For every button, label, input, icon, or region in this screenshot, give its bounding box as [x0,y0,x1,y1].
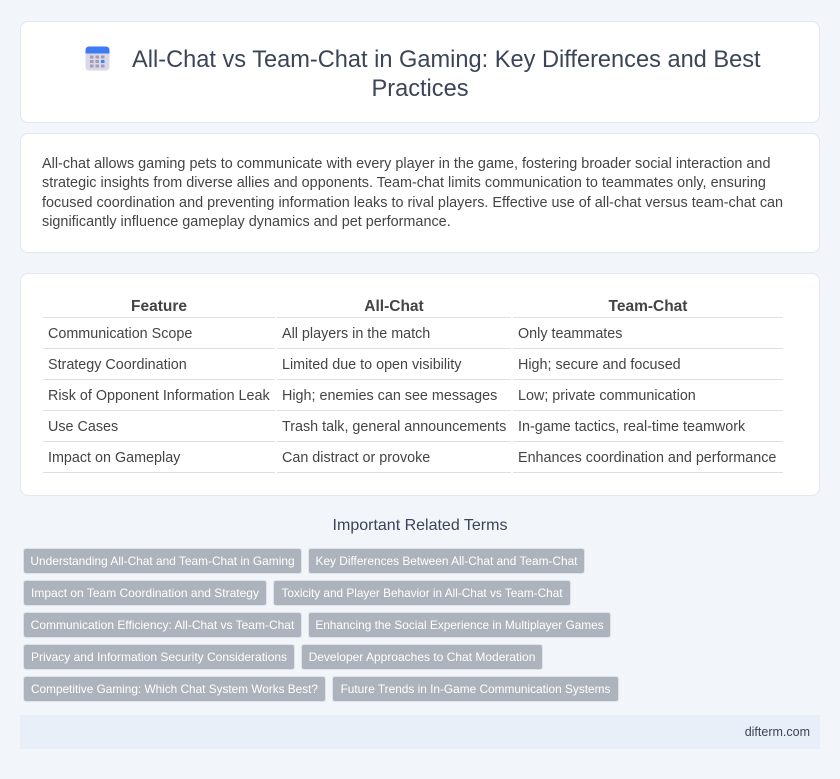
row: impact on gameplay [43,450,783,473]
table header rule [43,317,783,318]
tag [23,580,267,606]
table header: Feature: Feature [131,298,187,315]
text block: description: focused coordination and preventing information leaks to rival players. Effective use of all-chat versus team-chat can [42,195,783,211]
row: impact on gameplay: Can distract or provoke [282,450,430,466]
row: strategy coordination: Limited due to open visibility [282,357,461,373]
tag [23,548,302,574]
footer bar [20,715,820,749]
row: impact on gameplay: Impact on Gameplay [48,450,180,466]
text block: description [42,156,783,230]
table header: All-Chat: All-Chat [364,298,424,315]
row: information leak risk: High; enemies can see messages [282,388,497,404]
row: use cases: Use Cases [48,419,118,435]
comparison table [43,298,783,473]
row: communication scope [43,326,783,349]
icon: calendar grid [86,46,110,70]
tag: Key Differences Between All-Chat and Team-Chat [316,554,577,568]
panel: description card [20,133,820,253]
row: information leak risk: Low; private communication [518,388,696,404]
tag: Privacy and Information Security Considerations [31,650,287,664]
tag [301,644,543,670]
tag: Toxicity and Player Behavior in All-Chat vs Team-Chat [281,586,563,600]
title: All-Chat vs Team-Chat in Gaming: Key Differences and Best [132,47,761,73]
table header: Team-Chat: Team-Chat [609,298,687,315]
tag list [23,548,619,702]
tag: Impact on Team Coordination and Strategy [31,586,259,600]
panel: title card [20,21,820,123]
row: strategy coordination: High; secure and focused [518,357,681,373]
tag [308,548,585,574]
row: communication scope: All players in the match [282,326,430,342]
tag: Competitive Gaming: Which Chat System Works Best? [31,682,318,696]
row: use cases [43,419,783,442]
title [132,47,761,102]
tag [332,676,619,702]
heading: important related terms: Important Related Terms [333,517,507,534]
row: use cases: Trash talk, general announcements [282,419,506,435]
tag [273,580,571,606]
row: use cases: In-game tactics, real-time teamwork [518,419,745,435]
text block: description: All-chat allows gaming pets to communicate with every player in the game, fostering broader social interaction and [42,156,770,172]
text block: description: strategic insights from diverse allies and opponents. Team-chat limits communication to teammates only, ensuring [42,175,766,191]
text block: description: significantly influence gameplay dynamics and pet performance. [42,214,451,230]
tag: Future Trends in In-Game Communication Systems [341,682,610,696]
row: strategy coordination: Strategy Coordination [48,357,187,373]
footer: site name: difterm.com [745,725,810,739]
title: Practices [371,76,469,102]
tag [23,644,295,670]
row: information leak risk [43,388,783,411]
row: communication scope: Only teammates [518,326,622,342]
row: information leak risk: Risk of Opponent Information Leak [48,388,270,404]
tag [23,612,302,638]
tag: Communication Efficiency: All-Chat vs Team-Chat [31,618,294,632]
tag [308,612,611,638]
row: strategy coordination [43,357,783,380]
row: impact on gameplay: Enhances coordination and performance [518,450,776,466]
tag: Understanding All-Chat and Team-Chat in Gaming [30,554,295,568]
tag [23,676,326,702]
tag: Developer Approaches to Chat Moderation [309,650,535,664]
tag: Enhancing the Social Experience in Multiplayer Games [315,618,604,632]
row: communication scope: Communication Scope [48,326,192,342]
panel: comparison table card [20,273,820,496]
